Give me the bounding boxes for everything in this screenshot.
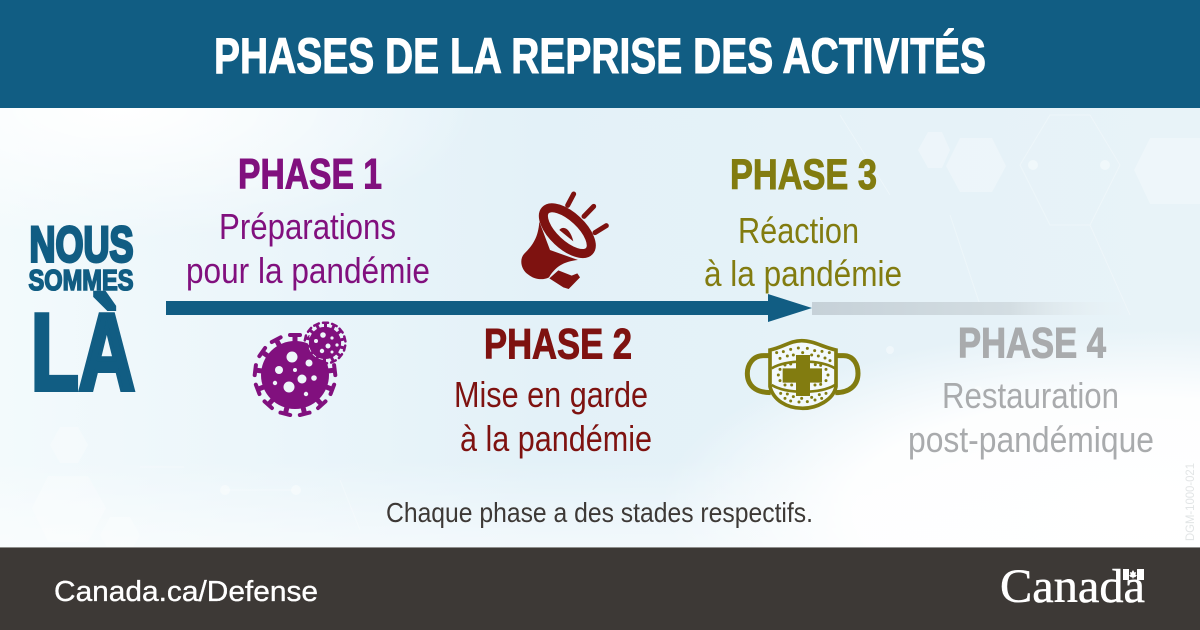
phase 3 text xyxy=(704,151,902,294)
footer band xyxy=(0,547,1200,630)
reference code: DGM-1000-021 xyxy=(1183,463,1197,541)
phase 4 text xyxy=(908,320,1154,460)
header band xyxy=(0,0,1200,108)
nous sommes là label: LÀ xyxy=(31,292,135,414)
phase 3 text: PHASE 3 xyxy=(730,151,877,199)
nous sommes là label: NOUS xyxy=(30,216,134,272)
phase 3 text: à la pandémie xyxy=(704,253,902,294)
timeline arrow xyxy=(166,294,1142,322)
footer url: Canada.ca/Defense xyxy=(54,576,318,608)
icon: megaphone xyxy=(521,194,606,289)
icon: virus xyxy=(252,322,347,417)
phase 4 text: Restauration xyxy=(942,375,1119,416)
nous sommes là label: SOMMES xyxy=(28,265,134,297)
phase 2 text: Mise en garde xyxy=(454,374,648,415)
icon: medical mask xyxy=(747,341,858,408)
phase 3 text: Réaction xyxy=(738,210,859,251)
phase 1 text: pour la pandémie xyxy=(186,250,430,291)
background panel xyxy=(0,108,1200,553)
phase 1 text: PHASE 1 xyxy=(238,150,382,198)
canada wordmark: Canada xyxy=(1000,560,1145,613)
phase 4 text: PHASE 4 xyxy=(958,320,1106,368)
phase 2 text xyxy=(454,320,652,459)
nous sommes là label xyxy=(28,216,135,414)
phase 2 text: à la pandémie xyxy=(460,418,652,459)
phase 4 text: post-pandémique xyxy=(908,419,1154,460)
note: stages: Chaque phase a des stades respectifs. xyxy=(386,497,813,528)
phase 1 text xyxy=(186,150,430,291)
title: PHASES DE LA REPRISE DES ACTIVITÉS xyxy=(214,28,986,84)
phase 2 text: PHASE 2 xyxy=(484,320,632,368)
phase 1 text: Préparations xyxy=(219,206,396,247)
